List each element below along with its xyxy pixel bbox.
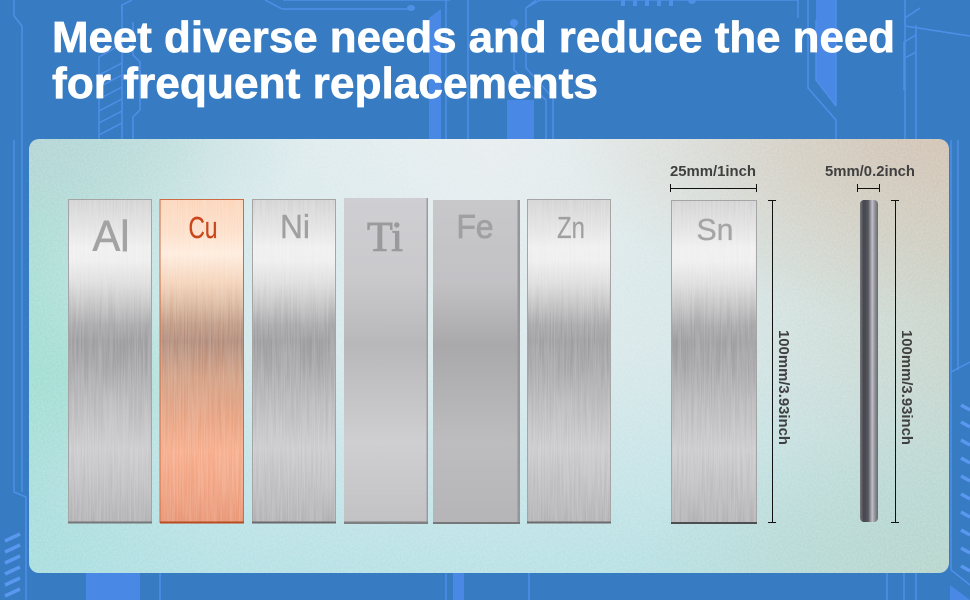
panel: metal samples bbox=[29, 139, 949, 573]
metal rod bbox=[860, 200, 878, 522]
height dimension: rod bbox=[891, 200, 915, 522]
metal strip: Sn: Sn bbox=[696, 212, 734, 247]
metal strip: Al: Al bbox=[92, 212, 130, 261]
metal strip: Cu: Cu bbox=[188, 210, 218, 245]
metal strip: Ni bbox=[252, 199, 336, 524]
height dimension: strip: 100mm/3.93inch bbox=[775, 330, 792, 445]
metal strip: Cu bbox=[160, 199, 244, 524]
height dimension: rod: 100mm/3.93inch bbox=[898, 330, 915, 445]
metal strip: Zn bbox=[527, 199, 611, 524]
width dimension: strip bbox=[670, 163, 756, 192]
metal strip: Ti: Ti bbox=[367, 215, 403, 261]
metal strip: Sn bbox=[671, 200, 757, 524]
metal strip: Al bbox=[68, 199, 152, 524]
width dimension: rod bbox=[825, 163, 915, 192]
height dimension: strip bbox=[768, 200, 792, 522]
width dimension: strip: 25mm/1inch bbox=[670, 163, 756, 180]
title: for frequent replacements bbox=[52, 59, 598, 108]
metal strip: Ni: Ni bbox=[280, 208, 310, 245]
metal strip: Ti bbox=[344, 198, 428, 524]
width dimension: rod: 5mm/0.2inch bbox=[825, 163, 915, 180]
metal strip: Fe: Fe bbox=[456, 208, 494, 245]
title: Meet diverse needs and reduce the need bbox=[52, 13, 895, 62]
metal strip: Fe bbox=[433, 200, 520, 524]
title bbox=[52, 13, 895, 108]
metal strip: Zn: Zn bbox=[557, 210, 585, 245]
